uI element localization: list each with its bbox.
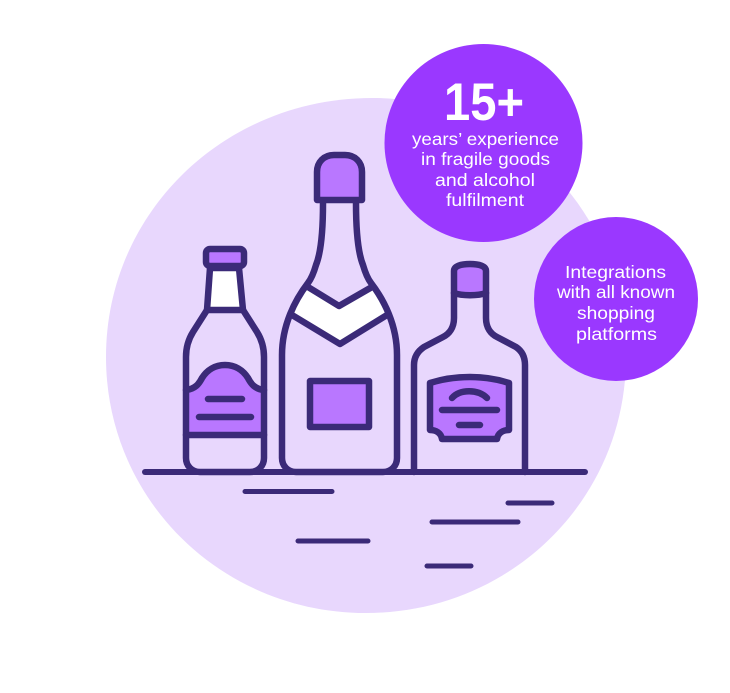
integrations circle [534, 217, 698, 381]
integrations text: Integrations [565, 262, 666, 282]
stat circle: 15+ years [384, 44, 582, 242]
right bottle [414, 264, 525, 472]
left bottle [186, 249, 264, 472]
stat description [412, 129, 559, 210]
integrations text: platforms [576, 324, 657, 344]
bottles illustration [145, 155, 585, 566]
integrations text: shopping [577, 303, 655, 323]
stat description: in fragile goods [421, 149, 550, 169]
stat number: 15+ [444, 73, 524, 132]
stat description: fulfilment [446, 190, 524, 210]
background blob [106, 98, 626, 613]
stat description: years’ experience [412, 129, 559, 149]
shelf line [145, 469, 585, 475]
integrations text [556, 262, 675, 344]
integrations text: with all known [556, 282, 675, 302]
stat description: and alcohol [435, 170, 535, 190]
center bottle [282, 155, 397, 472]
floor lines [245, 492, 552, 566]
